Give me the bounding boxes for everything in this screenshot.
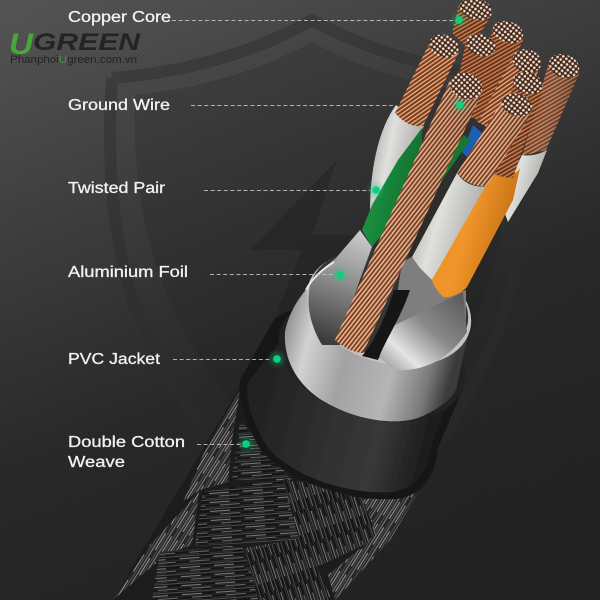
label: ground wire: Ground Wire bbox=[68, 97, 170, 114]
silver foil band bbox=[285, 232, 485, 421]
logo: UGREEN bbox=[9, 28, 141, 66]
cable illustration bbox=[113, 0, 582, 600]
orange wire bbox=[432, 168, 520, 297]
long copper core bbox=[335, 68, 486, 353]
blue wire bbox=[462, 125, 482, 157]
back copper wires bbox=[452, 0, 582, 156]
label: aluminium foil: Aluminium Foil bbox=[68, 264, 188, 281]
front white wire bbox=[412, 173, 487, 280]
twisted pair insulation bbox=[362, 105, 470, 247]
logo: UGREEN: PhanphoiUgreen.com.vn bbox=[10, 54, 137, 66]
PVC jacket bbox=[239, 273, 481, 499]
ground copper wire bbox=[395, 31, 462, 126]
label: double cotton weave bbox=[68, 434, 185, 471]
label: copper core: Copper Core bbox=[68, 9, 171, 26]
right white wire bbox=[500, 150, 547, 222]
front copper wires bbox=[457, 68, 546, 186]
inner foil tubes bbox=[306, 230, 467, 370]
label: pvc jacket: PVC Jacket bbox=[68, 351, 161, 368]
logo: UGREEN: U bbox=[9, 28, 34, 61]
label: double cotton weave: Double Cotton bbox=[68, 434, 185, 451]
labels bbox=[68, 9, 188, 471]
label: twisted pair: Twisted Pair bbox=[68, 180, 166, 197]
braided cotton weave bbox=[113, 380, 425, 600]
marker dots bbox=[239, 13, 467, 451]
leader lines bbox=[172, 20, 455, 444]
shield watermark bbox=[110, 20, 531, 440]
logo: UGREEN: GREEN bbox=[33, 29, 141, 56]
label: double cotton weave: Weave bbox=[68, 454, 125, 471]
